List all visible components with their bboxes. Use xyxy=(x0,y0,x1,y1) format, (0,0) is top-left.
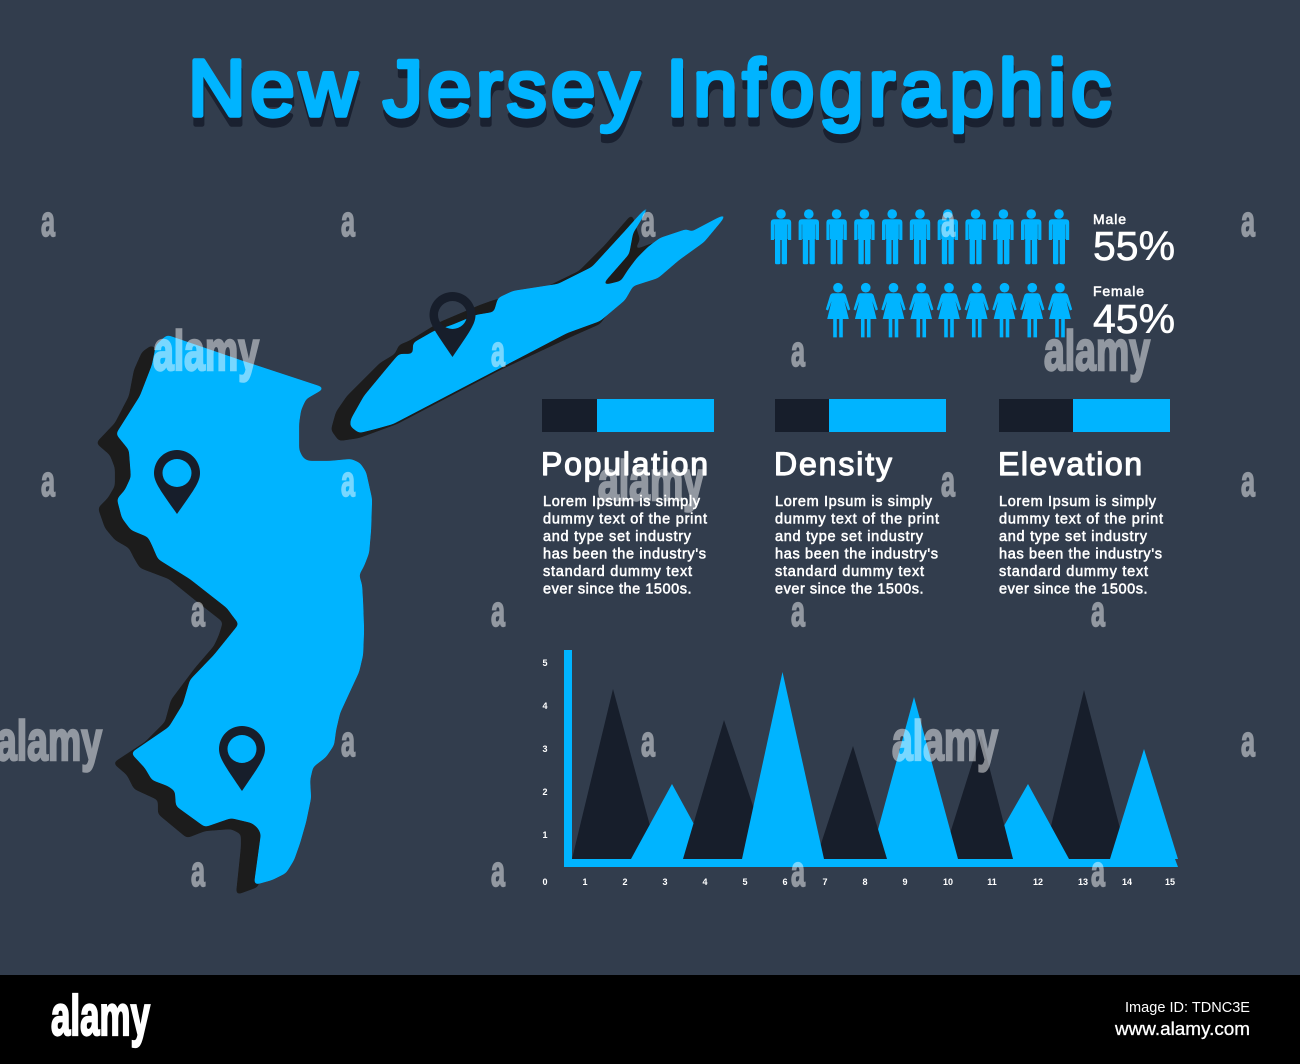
watermarks: a xyxy=(491,587,505,636)
watermarks: a xyxy=(341,457,355,506)
x axis labels: 12 xyxy=(1033,877,1043,887)
y axis labels: 2 xyxy=(542,787,548,797)
x axis labels: 15 xyxy=(1165,877,1175,887)
density text: and type set industry xyxy=(775,529,924,545)
female pictogram row xyxy=(826,283,1072,337)
x axis labels: 1 xyxy=(582,877,588,887)
population text: and type set industry xyxy=(543,529,692,545)
population text xyxy=(543,494,707,598)
y axis labels: 4 xyxy=(542,701,548,711)
density text: ever since the 1500s. xyxy=(775,582,924,598)
watermarks: a xyxy=(941,197,955,246)
population text: Lorem Ipsum is simply xyxy=(543,494,701,510)
elevation heading: Elevation xyxy=(998,446,1142,482)
y axis labels: 5 xyxy=(542,658,548,668)
watermarks: a xyxy=(341,717,355,766)
watermarks: a xyxy=(41,197,55,246)
title: Infographic xyxy=(667,53,1112,142)
x axis labels: 6 xyxy=(782,877,788,887)
chart triangles xyxy=(572,672,1178,859)
watermarks xyxy=(0,197,1255,896)
male pictogram row xyxy=(771,209,1069,264)
triangle chart xyxy=(542,650,1178,887)
map shadow: main body xyxy=(96,345,300,895)
watermarks: a xyxy=(491,327,505,376)
watermarks: a xyxy=(1091,847,1105,896)
watermarks: alamy xyxy=(0,709,102,772)
x axis labels: 2 xyxy=(622,877,628,887)
elevation text: Lorem Ipsum is simply xyxy=(999,494,1157,510)
x axis labels: 10 xyxy=(943,877,953,887)
density text: Lorem Ipsum is simply xyxy=(775,494,933,510)
title: New xyxy=(189,53,358,142)
footer bar xyxy=(0,975,1300,1064)
elevation text: and type set industry xyxy=(999,529,1148,545)
elevation text xyxy=(999,494,1163,598)
title: Jersey xyxy=(383,44,640,133)
x axis labels: 7 xyxy=(822,877,828,887)
map shadow: northern arm xyxy=(331,214,658,441)
watermarks: a xyxy=(191,587,205,636)
footer logo: alamy xyxy=(51,984,150,1048)
watermarks: a xyxy=(1241,197,1255,246)
x axis labels: 3 xyxy=(662,877,668,887)
population text: dummy text of the print xyxy=(543,512,707,528)
population bar xyxy=(542,399,714,432)
title: New xyxy=(188,44,357,133)
male label: Male xyxy=(1093,211,1126,227)
x axis labels: 9 xyxy=(902,877,908,887)
watermarks: a xyxy=(941,457,955,506)
x axis labels xyxy=(542,877,1175,887)
panel: elevation xyxy=(998,399,1170,598)
map pin: south xyxy=(219,726,265,791)
density text: has been the industry's xyxy=(775,546,938,562)
elevation text: dummy text of the print xyxy=(999,512,1163,528)
male label: 55% xyxy=(1093,223,1175,269)
title: Infographic xyxy=(666,44,1111,133)
map pin: north xyxy=(430,292,476,357)
watermarks: a xyxy=(641,717,655,766)
chart axes xyxy=(564,650,1178,867)
map of New Jersey xyxy=(96,196,729,895)
x axis labels: 11 xyxy=(987,877,997,887)
image id: Image ID: TDNC3E xyxy=(1125,999,1250,1016)
watermarks: alamy xyxy=(1044,319,1150,382)
x axis labels: 5 xyxy=(742,877,748,887)
map northern arm xyxy=(350,196,729,433)
density text xyxy=(775,494,939,598)
map body xyxy=(116,335,372,885)
watermarks: a xyxy=(491,847,505,896)
elevation text: standard dummy text xyxy=(999,564,1148,580)
title xyxy=(188,44,1112,142)
panel: density xyxy=(774,399,946,598)
density text: standard dummy text xyxy=(775,564,924,580)
watermarks: a xyxy=(341,197,355,246)
watermarks: a xyxy=(791,847,805,896)
x axis labels: 14 xyxy=(1122,877,1132,887)
x axis labels: 0 xyxy=(542,877,548,887)
watermarks: a xyxy=(1091,587,1105,636)
density bar xyxy=(775,399,946,432)
watermarks: a xyxy=(641,197,655,246)
elevation bar xyxy=(999,399,1170,432)
population text: has been the industry's xyxy=(543,546,706,562)
watermarks: a xyxy=(1241,717,1255,766)
density text: dummy text of the print xyxy=(775,512,939,528)
panel: population xyxy=(541,399,714,598)
female label: Female xyxy=(1093,283,1144,299)
x axis labels: 4 xyxy=(702,877,708,887)
density heading: Density xyxy=(774,446,892,482)
watermarks: a xyxy=(41,457,55,506)
x axis labels: 8 xyxy=(862,877,868,887)
population text: ever since the 1500s. xyxy=(543,582,692,598)
population heading: Population xyxy=(541,446,708,482)
watermarks: a xyxy=(791,327,805,376)
y axis labels xyxy=(542,658,548,840)
map pin: west xyxy=(154,450,200,514)
population text: standard dummy text xyxy=(543,564,692,580)
x axis labels: 13 xyxy=(1078,877,1088,887)
website: www.alamy.com xyxy=(1114,1019,1250,1039)
female label: 45% xyxy=(1093,296,1175,342)
y axis labels: 1 xyxy=(542,830,548,840)
watermarks: alamy xyxy=(153,319,259,382)
watermarks: a xyxy=(191,847,205,896)
watermarks: alamy xyxy=(598,449,704,512)
elevation text: has been the industry's xyxy=(999,546,1162,562)
y axis labels: 3 xyxy=(542,744,548,754)
watermarks: a xyxy=(1241,457,1255,506)
watermarks: a xyxy=(791,587,805,636)
elevation text: ever since the 1500s. xyxy=(999,582,1148,598)
watermarks: alamy xyxy=(892,709,998,772)
title: Jersey xyxy=(384,53,640,142)
